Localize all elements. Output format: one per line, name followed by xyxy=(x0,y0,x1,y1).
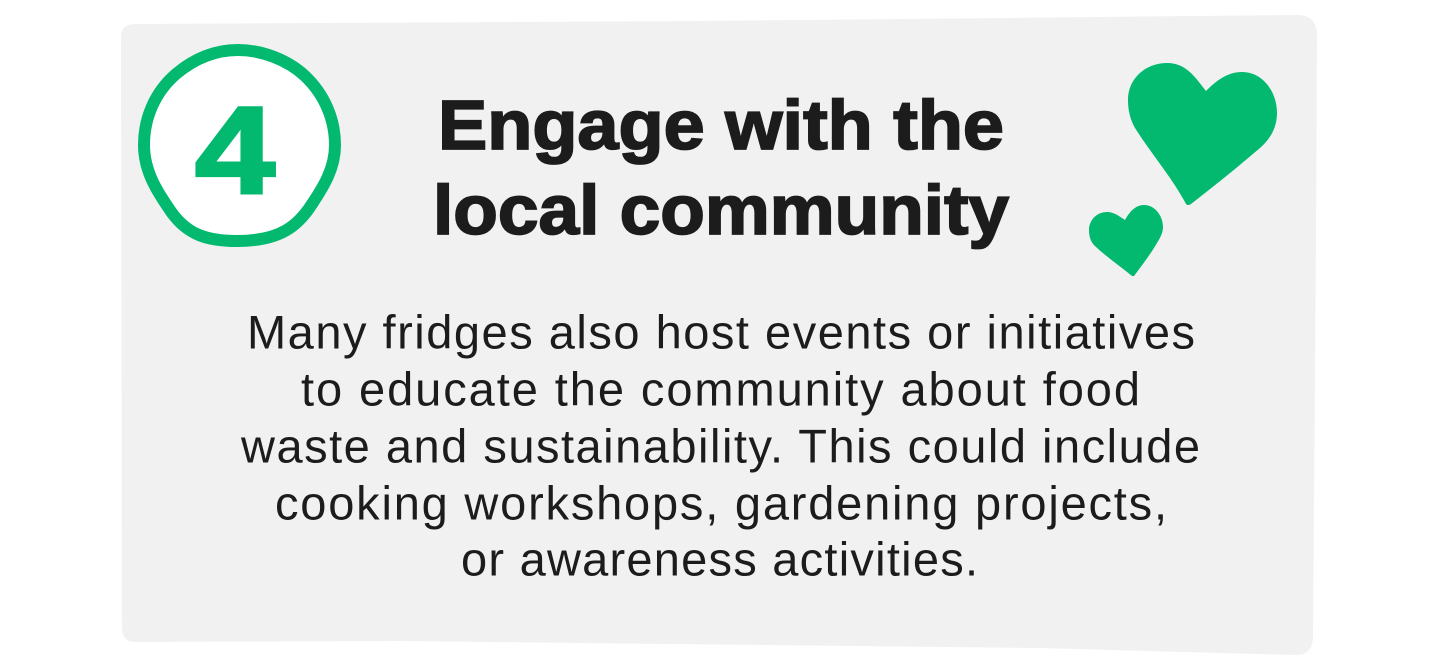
body text: waste and sustainability. This could include xyxy=(240,420,1200,472)
heading: Engage with the xyxy=(438,86,1004,164)
panel: community engagement card xyxy=(121,15,1317,655)
body text: to educate the community about food xyxy=(301,362,1140,416)
body text: or awareness activities. xyxy=(461,532,978,586)
icon: large heart xyxy=(1128,63,1277,205)
icon: number badge xyxy=(144,50,335,241)
number 4: 4 xyxy=(195,82,275,220)
body text: cooking workshops, gardening projects, xyxy=(275,476,1167,530)
body text: Many fridges also host events or initiatives xyxy=(247,306,1195,358)
body text xyxy=(240,306,1200,586)
heading: local community xyxy=(433,171,1009,249)
heading xyxy=(433,86,1009,249)
icon: small heart xyxy=(1089,205,1163,276)
